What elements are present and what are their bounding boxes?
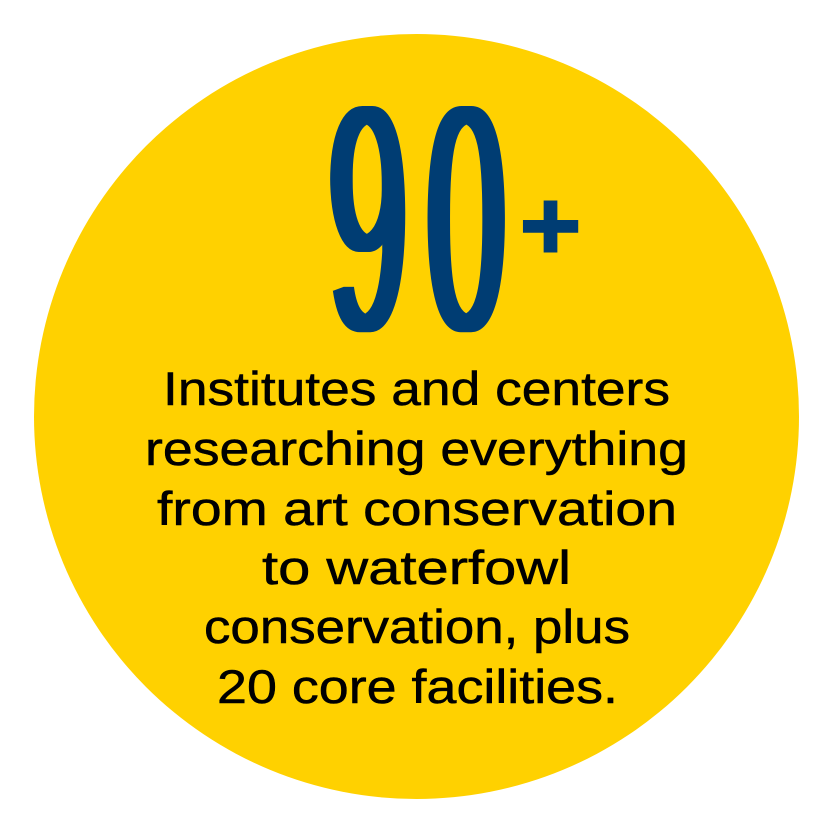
digits 90: 9 [328, 36, 407, 402]
description text: Institutes and centers [163, 362, 670, 415]
description text: to waterfowl [262, 541, 571, 594]
big number 90+ [328, 36, 582, 402]
description text: 20 core facilities. [217, 660, 618, 713]
digits 90 [328, 36, 505, 402]
digits 90: 0 [427, 36, 505, 402]
description text: from art conservation [157, 482, 677, 535]
description text: conservation, plus [204, 600, 630, 653]
plus sign: + [520, 170, 582, 280]
description text [145, 362, 688, 713]
description text: researching everything [145, 422, 688, 475]
